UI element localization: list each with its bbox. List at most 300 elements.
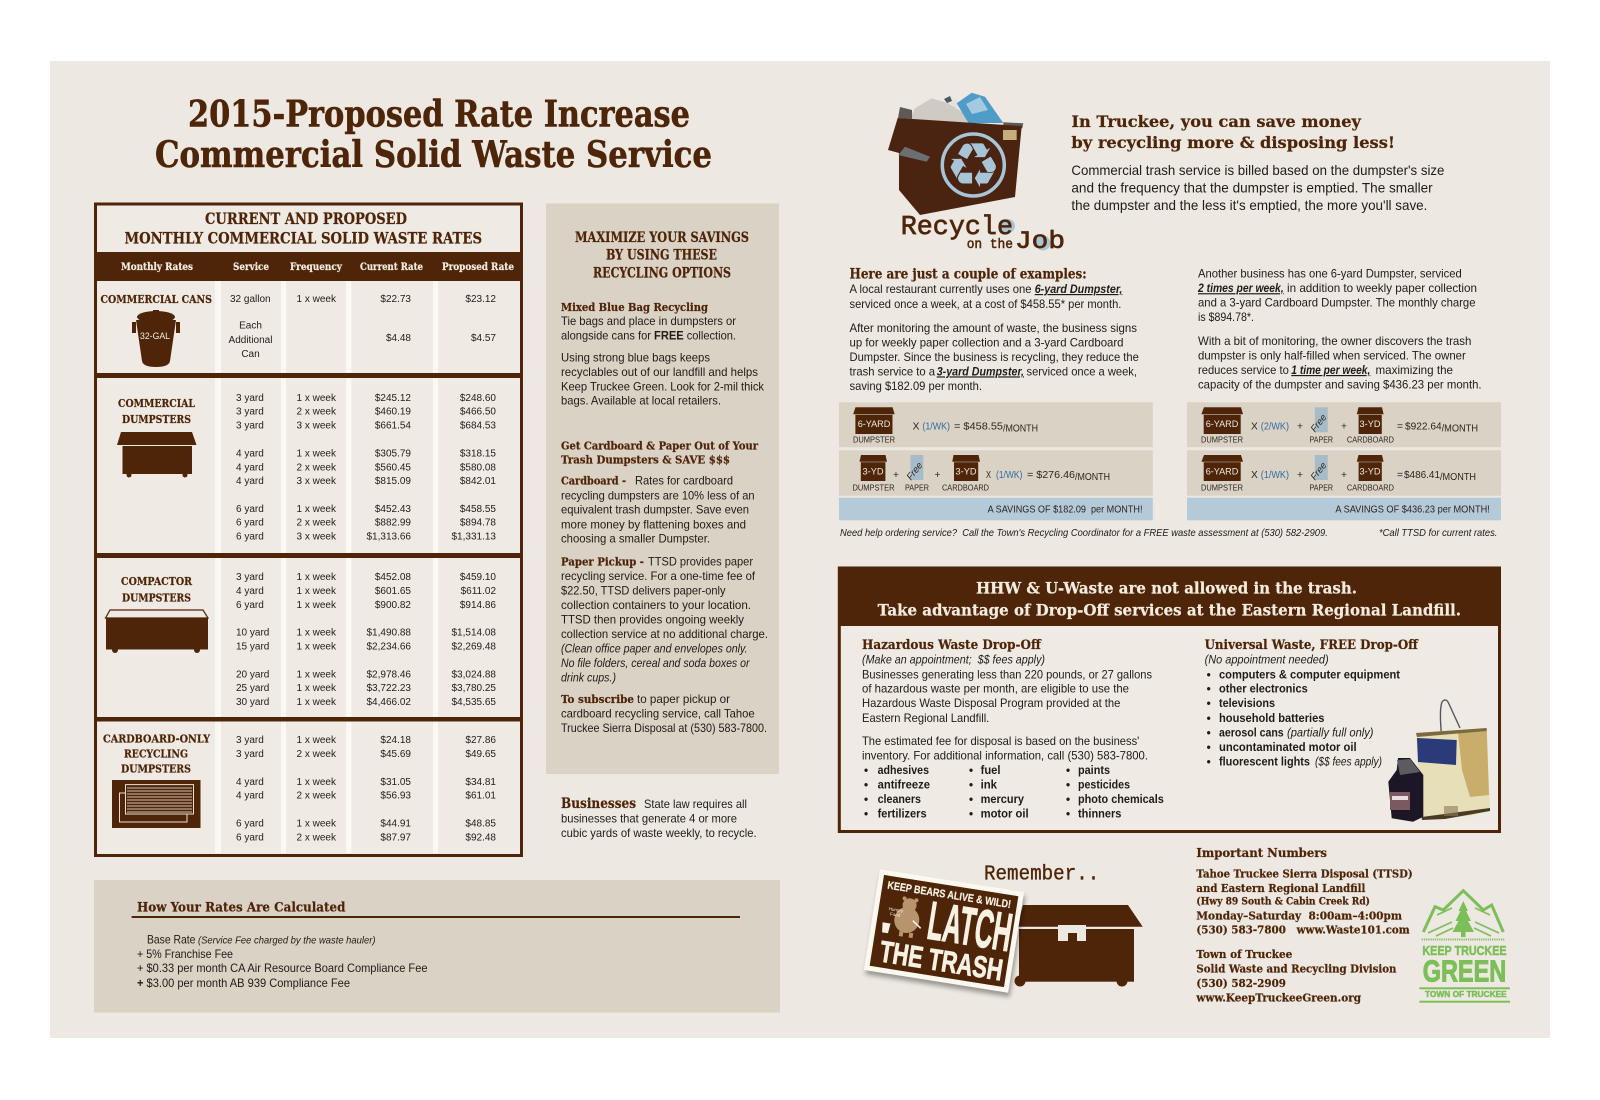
compactor rows: 4 yard [236,586,264,597]
dumpster rows: 4 yard [236,462,264,474]
important numbers: Tahoe Truckee Sierra Disposal (TTSD) [1196,866,1413,880]
table heading [124,209,482,248]
dumpster rows: $815.09 [375,476,411,487]
help footnote: Need help ordering service? Call the Town's Recycling Coordinator for a FREE waste assessment at (530) 582-2909. [840,527,1328,539]
recycling options heading [575,230,749,282]
hazardous materials list: adhesives [878,764,929,777]
cardboard rows [236,735,496,844]
commercial cans label: COMMERCIAL CANS [100,292,212,306]
universal waste text: • [1207,755,1211,768]
cardboard rows: $34.81 [465,777,496,788]
waste banner text: HHW & U-Waste are not allowed in the trash. [976,579,1357,598]
cardboard rows: 1 x week [296,818,337,830]
cardboard and paper text: (Clean office paper and envelopes only. [561,643,748,656]
important numbers: and Eastern Regional Landfill [1196,881,1366,895]
recycling options heading: RECYCLING OPTIONS [593,266,731,282]
dumpster rows: 2 x week [296,518,337,528]
mixed blue bag text [561,300,764,408]
mixed blue bag text: Tie bags and place in dumpsters or [561,315,736,328]
hazardous waste text [862,638,1152,763]
examples: left column: Dumpster. Since the business is recycling, they reduce the [850,351,1139,364]
waste banner text [878,579,1461,620]
before: twice weekly plan: + [1297,422,1303,432]
icon: 32 gallon can [132,310,180,367]
after: once weekly plan: CARDBOARD [1347,482,1394,492]
examples: right column: maximizing the [1376,364,1453,377]
dumpster rows: 1 x week [296,448,337,460]
hazardous materials list: cleaners [878,793,921,806]
businesses note: Businesses [561,796,636,812]
before: twice weekly plan: CARDBOARD [1347,435,1394,445]
after: once weekly plan: DUMPSTER [1201,482,1243,492]
cardboard and paper text: To subscribe [561,692,634,706]
mixed blue bag text: alongside cans for FREE collection. [561,330,736,342]
cans rows: Each [239,320,262,332]
universal waste text [1205,638,1419,768]
cardboard rows: $31.05 [380,777,411,788]
table column headers: Service [233,261,269,273]
compactor rows: $601.65 [375,586,411,597]
hazardous materials list: • [864,779,868,792]
cardboard and paper text: Trash Dumpsters & SAVE $$$ [561,453,730,467]
after: once weekly plan: (1/WK) [1261,470,1289,481]
savings callout two: A SAVINGS OF $436.23 per MONTH! [1335,504,1490,515]
save money heading: In Truckee, you can save money [1071,112,1362,131]
dumpster rows: $842.01 [460,476,496,487]
compactor rows: $459.10 [460,572,496,583]
compactor rows: $4,535.65 [452,697,496,708]
examples: left column [850,267,1139,393]
examples: right column [1197,268,1482,392]
calculation lines: Base Rate [147,933,195,946]
dumpster rows: $882.99 [375,518,411,528]
cardboard and paper text: choosing a smaller Dumpster. [561,533,710,546]
dumpster rows: 3 yard [236,420,264,432]
bear food note and can: Food [890,911,901,918]
cardboard rows: $27.86 [465,735,496,746]
compactor rows: $2,234.66 [366,642,411,652]
cardboard rows: $44.91 [380,818,411,830]
cans rows: 1 x week [296,294,337,305]
cardboard and paper text: Rates for cardboard [635,475,733,488]
important numbers: Monday–Saturday 8:00am–4:00pm [1196,908,1402,922]
icon: commercial dumpster [117,432,196,478]
important numbers: (530) 583-7800 www.Waste101.com [1196,923,1410,937]
cardboard and paper text: Cardboard - [561,474,626,488]
universal waste text: televisions [1219,697,1275,710]
logo: recycle on the job: Job [1015,227,1065,256]
dumpster rows: 3 x week [296,476,337,487]
cardboard rows: $45.69 [380,749,411,760]
cans rows [229,294,496,360]
commercial dumpsters label: DUMPSTERS [122,412,191,426]
mixed blue bag text: bags. Available at local retailers. [561,395,721,408]
save money text [1071,163,1445,213]
businesses note [561,796,757,840]
cans rows: $4.57 [471,333,496,344]
table column headers: Monthly Rates [121,261,193,273]
universal waste text: • [1207,683,1211,696]
commercial dumpsters label [118,396,195,426]
hazardous materials list: • [969,779,973,792]
after: once weekly plan: /MONTH [1440,472,1476,483]
mixed blue bag text: Keep Truckee Green. Look for 2-mil thick [561,380,764,393]
businesses note: State law requires all [644,798,747,811]
dumpster rows: 6 yard [236,504,264,515]
compactor rows: 15 yard [236,642,269,652]
examples: right column: Another business has one 6-yard Dumpster, serviced [1198,268,1462,281]
compactor rows: 1 x week [296,572,337,583]
compactor rows: 10 yard [236,628,269,638]
cardboard and paper text: Truckee Sierra Disposal at (530) 583-7800. [561,722,767,735]
universal waste text: household batteries [1219,712,1325,725]
after: three yard plan: /MONTH [1075,472,1110,483]
examples: right column: is $894.78*. [1198,311,1254,324]
calculation lines [137,933,428,990]
compactor rows: $1,490.88 [366,628,411,638]
important numbers: Town of Truckee [1196,947,1292,961]
compactor rows: 1 x week [296,628,337,638]
examples: right column: dumpster is only half-filled when serviced. The owner [1198,350,1466,363]
cardboard and paper text: collection containers to your location. [561,599,751,612]
important numbers: Important Numbers [1196,845,1327,860]
cardboard rows: 2 x week [296,790,337,802]
after: three yard plan: PAPER [905,482,929,492]
logo: keep truckee green: KEEP TRUCKEE [1422,943,1507,958]
dumpster rows: $305.79 [375,448,411,460]
examples: left column: up for weekly paper collection and a 3-yard Cardboard [850,336,1124,350]
table column headers: Frequency [290,261,343,273]
dumpster rows: $1,313.66 [366,532,411,542]
logo: keep truckee green [1419,891,1510,1003]
examples: left column: trash service to a [850,365,935,378]
before: twice weekly plan: + [1341,422,1347,432]
compactor rows: 1 x week [296,586,337,597]
compactor rows: $3,024.88 [452,670,496,680]
hazardous materials list: • [969,808,973,821]
before: six yard dumpster: 6-YARD [858,419,890,430]
before: six yard dumpster: (1/WK) [922,422,950,432]
cans rows: $23.12 [465,294,496,305]
compactor rows: 6 yard [236,600,264,611]
cans rows: Can [241,349,260,360]
commercial dumpsters label: COMMERCIAL [118,396,195,410]
cardboard rows: 3 yard [236,749,264,760]
examples: left column: 3-yard Dumpster, [937,365,1024,378]
cardboard rows: $92.48 [465,832,496,844]
logo: keep truckee green: GREEN [1423,954,1506,989]
table heading: CURRENT AND PROPOSED [205,209,407,228]
dumpster rows: $318.15 [460,448,496,460]
cardboard rows: $24.18 [380,735,411,746]
before: twice weekly plan: /MONTH [1442,424,1478,434]
dumpster rows: $661.54 [375,420,411,432]
cardboard and paper text: cardboard recycling service, call Tahoe [561,708,755,721]
cardboard rows: $61.01 [465,790,496,802]
universal waste text: uncontaminated motor oil [1219,741,1357,754]
dumpster rows: 6 yard [236,518,264,528]
dumpster rows: 4 yard [236,476,264,487]
examples: left column: Here are just a couple of examples: [850,267,1087,283]
compactor rows: 3 yard [236,572,264,583]
cardboard and paper text: to paper pickup or [637,693,730,706]
examples: right column: and a 3-yard Cardboard Dumpster. The monthly charge [1198,296,1476,310]
before: twice weekly plan: Free [1309,412,1329,435]
cardboard rows: 6 yard [236,832,264,844]
after: three yard plan: = $276.46 [1027,470,1075,481]
panel: recycling options [546,204,779,774]
hazardous materials list: thinners [1078,808,1122,821]
after: once weekly plan: X [1251,470,1258,481]
table column headers [121,261,514,273]
universal waste text: ($$ fees apply) [1315,755,1382,768]
hazardous materials list: paints [1078,764,1110,777]
examples: right column: reduces service to [1198,364,1289,377]
important numbers: www.KeepTruckeeGreen.org [1195,990,1361,1004]
examples: right column: capacity of the dumpster and saving $436.23 per month. [1198,379,1482,392]
help footnote: *Call TTSD for current rates. [1379,527,1497,539]
dumpster rows: 4 yard [236,448,264,460]
hazardous waste text: Businesses generating less than 220 pounds, or 27 gallons [862,668,1152,681]
table column headers: Proposed Rate [442,261,514,273]
important numbers: (530) 582-2909 [1196,976,1286,990]
hazardous materials list: • [1066,808,1070,821]
before: twice weekly plan: X [1251,422,1258,432]
icon: brown dumpster [1014,905,1143,986]
mixed blue bag text: recyclables out of our landfill and helps [561,366,758,379]
after: three yard plan: Free [905,460,925,483]
icon: 32 gallon can: 32-GAL [140,331,170,341]
compactor rows: $611.02 [461,586,496,597]
cardboard and paper text: recycling service. For a one-time fee of [561,570,756,583]
calculation lines: + $0.33 per month CA Air Resource Board Compliance Fee [137,962,428,975]
after: three yard plan: + [934,470,940,481]
remember label: Remember.. [984,863,1099,886]
universal waste text: computers & computer equipment [1219,668,1400,681]
compactor rows: 1 x week [296,600,337,611]
compactor label: COMPACTOR [121,574,192,588]
icon: cardboard stack [112,780,200,828]
hazardous materials list: antifreeze [878,779,930,792]
examples: left column: serviced once a week, [1026,365,1137,378]
dumpster rows: $466.50 [460,406,496,418]
after: once weekly plan: 3-YD [1360,467,1381,478]
before: twice weekly plan: $922.64 [1405,422,1442,432]
dumpster rows: 2 x week [296,406,337,418]
compactor rows: $900.82 [375,600,411,611]
logo: recycle on the job [901,213,1065,256]
title: Commercial Solid Waste Service [155,134,712,176]
examples: left column: 6-yard Dumpster, [1035,283,1122,296]
savings chart: example one [839,402,1153,520]
cardboard and paper text: equivalent trash dumpster. Save even [561,504,749,517]
after: once weekly plan: = [1397,470,1403,481]
after: three yard plan: (1/WK) [996,470,1022,481]
examples: left column: serviced once a week, at a cost of $458.55* per month. [850,298,1121,311]
examples: right column: in addition to weekly paper collection [1287,282,1477,295]
sign: latch the trash: THE TRASH [877,935,1005,987]
hazardous materials list: • [969,764,973,777]
compactor rows: $4,466.02 [366,697,411,708]
examples: left column: saving $182.09 per month. [850,380,982,393]
sign: latch the trash [863,869,1026,997]
hazardous materials list: • [864,764,868,777]
universal waste text: • [1207,741,1211,754]
businesses note: cubic yards of waste weekly, to recycle. [561,827,757,840]
icon: paint can and motor oil jug [1388,700,1490,822]
before: six yard dumpster: = $458.55 [954,422,1003,432]
cardboard and paper text: collection service at no additional charge. [561,628,768,641]
compactor rows: $3,780.25 [452,683,496,694]
compactor rows [236,572,496,708]
universal waste text: other electronics [1219,683,1308,696]
compactor label [121,574,192,604]
hazardous waste text: Hazardous Waste Drop-Off [862,638,1042,653]
sign: latch the trash: LATCH [924,891,1016,963]
sign: latch the trash: KEEP BEARS ALIVE & WILD! [886,880,1012,911]
save money text: and the frequency that the dumpster is emptied. The smaller [1071,180,1433,196]
before: six yard dumpster: X [913,422,920,432]
dumpster rows: $894.78 [460,518,496,528]
compactor rows: 25 yard [236,683,269,694]
after: three yard plan: 3-YD [956,467,977,478]
save money heading: by recycling more & disposing less! [1071,133,1395,152]
dumpster rows: $460.19 [375,406,411,418]
after: three yard plan: CARDBOARD [942,482,989,492]
hazardous materials list: fertilizers [878,808,927,821]
after: once weekly plan: $486.41 [1404,470,1440,481]
important numbers: (Hwy 89 South & Cabin Creek Rd) [1196,896,1370,907]
cardboard rows: $56.93 [380,790,411,802]
cardboard and paper text: No file folders, cereal and soda boxes or [561,657,750,670]
hazardous materials list: • [1066,764,1070,777]
compactor rows: $2,978.46 [366,670,411,680]
dumpster rows: $580.08 [460,462,496,474]
compactor rows: $452.08 [375,572,411,583]
recycling options heading: MAXIMIZE YOUR SAVINGS [575,230,749,246]
cardboard rows: 4 yard [236,777,264,788]
hazardous waste text: inventory. For additional information, call (530) 583-7800. [862,750,1148,763]
compactor rows: 1 x week [296,642,337,652]
before: twice weekly plan: DUMPSTER [1201,435,1243,445]
hazardous waste text: of hazardous waste per month, are eligible to use the [862,683,1129,696]
compactor rows: 1 x week [296,670,337,680]
after: once weekly plan: + [1297,470,1303,481]
cardboard rows: 4 yard [236,790,264,802]
compactor rows: 30 yard [236,697,269,708]
examples: left column: After monitoring the amount of waste, the business signs [850,322,1137,335]
after: once weekly plan: PAPER [1310,482,1333,492]
savings chart: example two [1187,402,1501,520]
universal waste text: • [1207,712,1211,725]
hazardous materials list [864,764,1164,821]
savings callout one: A SAVINGS OF $182.09 per MONTH! [988,504,1142,515]
cardboard and paper text: $22.50, TTSD delivers paper-only [561,584,726,597]
cardboard rows: $49.65 [465,749,496,760]
panel: how rates are calculated [94,880,780,1012]
cardboard rows: 6 yard [236,818,264,830]
before: twice weekly plan: 3-YD [1360,419,1381,430]
cardboard and paper text: recycling dumpsters are 10% less of an [561,489,755,502]
cardboard rows: $48.85 [465,818,496,830]
hazardous waste text: Eastern Regional Landfill. [862,712,989,725]
bear food note and can [881,905,904,935]
table column headers: Current Rate [360,261,423,273]
important numbers [1195,845,1413,1004]
before: twice weekly plan [1201,407,1478,445]
before: twice weekly plan: PAPER [1310,435,1333,445]
after: once weekly plan: 6-YARD [1206,467,1238,478]
table heading: MONTHLY COMMERCIAL SOLID WASTE RATES [124,228,482,248]
hazardous materials list: ink [981,779,997,792]
cardboard and paper text: drink cups.) [561,672,616,684]
after: once weekly plan [1201,455,1476,492]
dumpster rows: 6 yard [236,532,264,542]
cardboard label: DUMPSTERS [121,762,191,776]
hazardous materials list: • [864,793,868,806]
businesses note: businesses that generate 4 or more [561,813,737,826]
dumpster rows: $248.60 [460,393,496,404]
after: three yard plan [852,455,1110,492]
dumpster rows [236,393,496,542]
dumpster rows: $684.53 [460,420,496,432]
dumpster rows: $245.12 [375,393,411,404]
panel: rates table [94,204,523,856]
after: once weekly plan: + [1341,470,1347,481]
cans rows: 32 gallon [230,294,271,305]
cardboard rows: 3 yard [236,735,264,746]
before: six yard dumpster: DUMPSTER [853,435,895,445]
before: six yard dumpster [853,407,1038,445]
dumpster rows: 3 yard [236,393,264,404]
title: 2015-Proposed Rate Increase [188,94,690,136]
hazardous materials list: • [1066,779,1070,792]
hazardous materials list: • [969,793,973,806]
calculation lines: + $3.00 per month AB 939 Compliance Fee [137,977,350,990]
dumpster rows: $458.55 [460,504,496,515]
logo: keep truckee green: TOWN OF TRUCKEE [1425,989,1507,999]
hazardous waste text: (Make an appointment; $$ fees apply) [862,654,1045,667]
icon: recycling dumpster illustration: ♻ [946,129,1001,202]
dumpster rows: 2 x week [296,462,337,474]
hazardous materials list: pesticides [1078,779,1130,792]
compactor rows: $914.86 [460,600,496,611]
calculation heading: How Your Rates Are Calculated [137,900,345,916]
compactor rows: 20 yard [236,670,269,680]
icon: compactor dumpster [106,610,208,653]
cardboard and paper text: TTSD then provides ongoing weekly [561,613,744,626]
mixed blue bag text: Mixed Blue Bag Recycling [561,300,708,314]
examples: right column: 2 times per week, [1197,282,1284,295]
dumpster rows: 3 x week [296,420,337,432]
after: three yard plan: DUMPSTER [852,482,894,492]
cardboard rows: $87.97 [380,832,411,844]
universal waste text: (No appointment needed) [1205,654,1329,667]
cardboard and paper text: TTSD provides paper [648,555,753,568]
universal waste text: • [1207,668,1211,681]
compactor rows: $3,722.23 [366,683,411,694]
cardboard label: CARDBOARD-ONLY [103,732,211,746]
cans rows: $4.48 [386,333,411,344]
title [155,94,712,176]
compactor rows: $2,269.48 [452,642,496,652]
dumpster rows: $560.45 [375,462,411,474]
dumpster rows: 1 x week [296,393,337,404]
hazardous materials list: • [1066,793,1070,806]
after: three yard plan: X [986,470,991,481]
before: twice weekly plan: 6-YARD [1206,419,1238,430]
cans rows: $22.73 [380,294,411,305]
